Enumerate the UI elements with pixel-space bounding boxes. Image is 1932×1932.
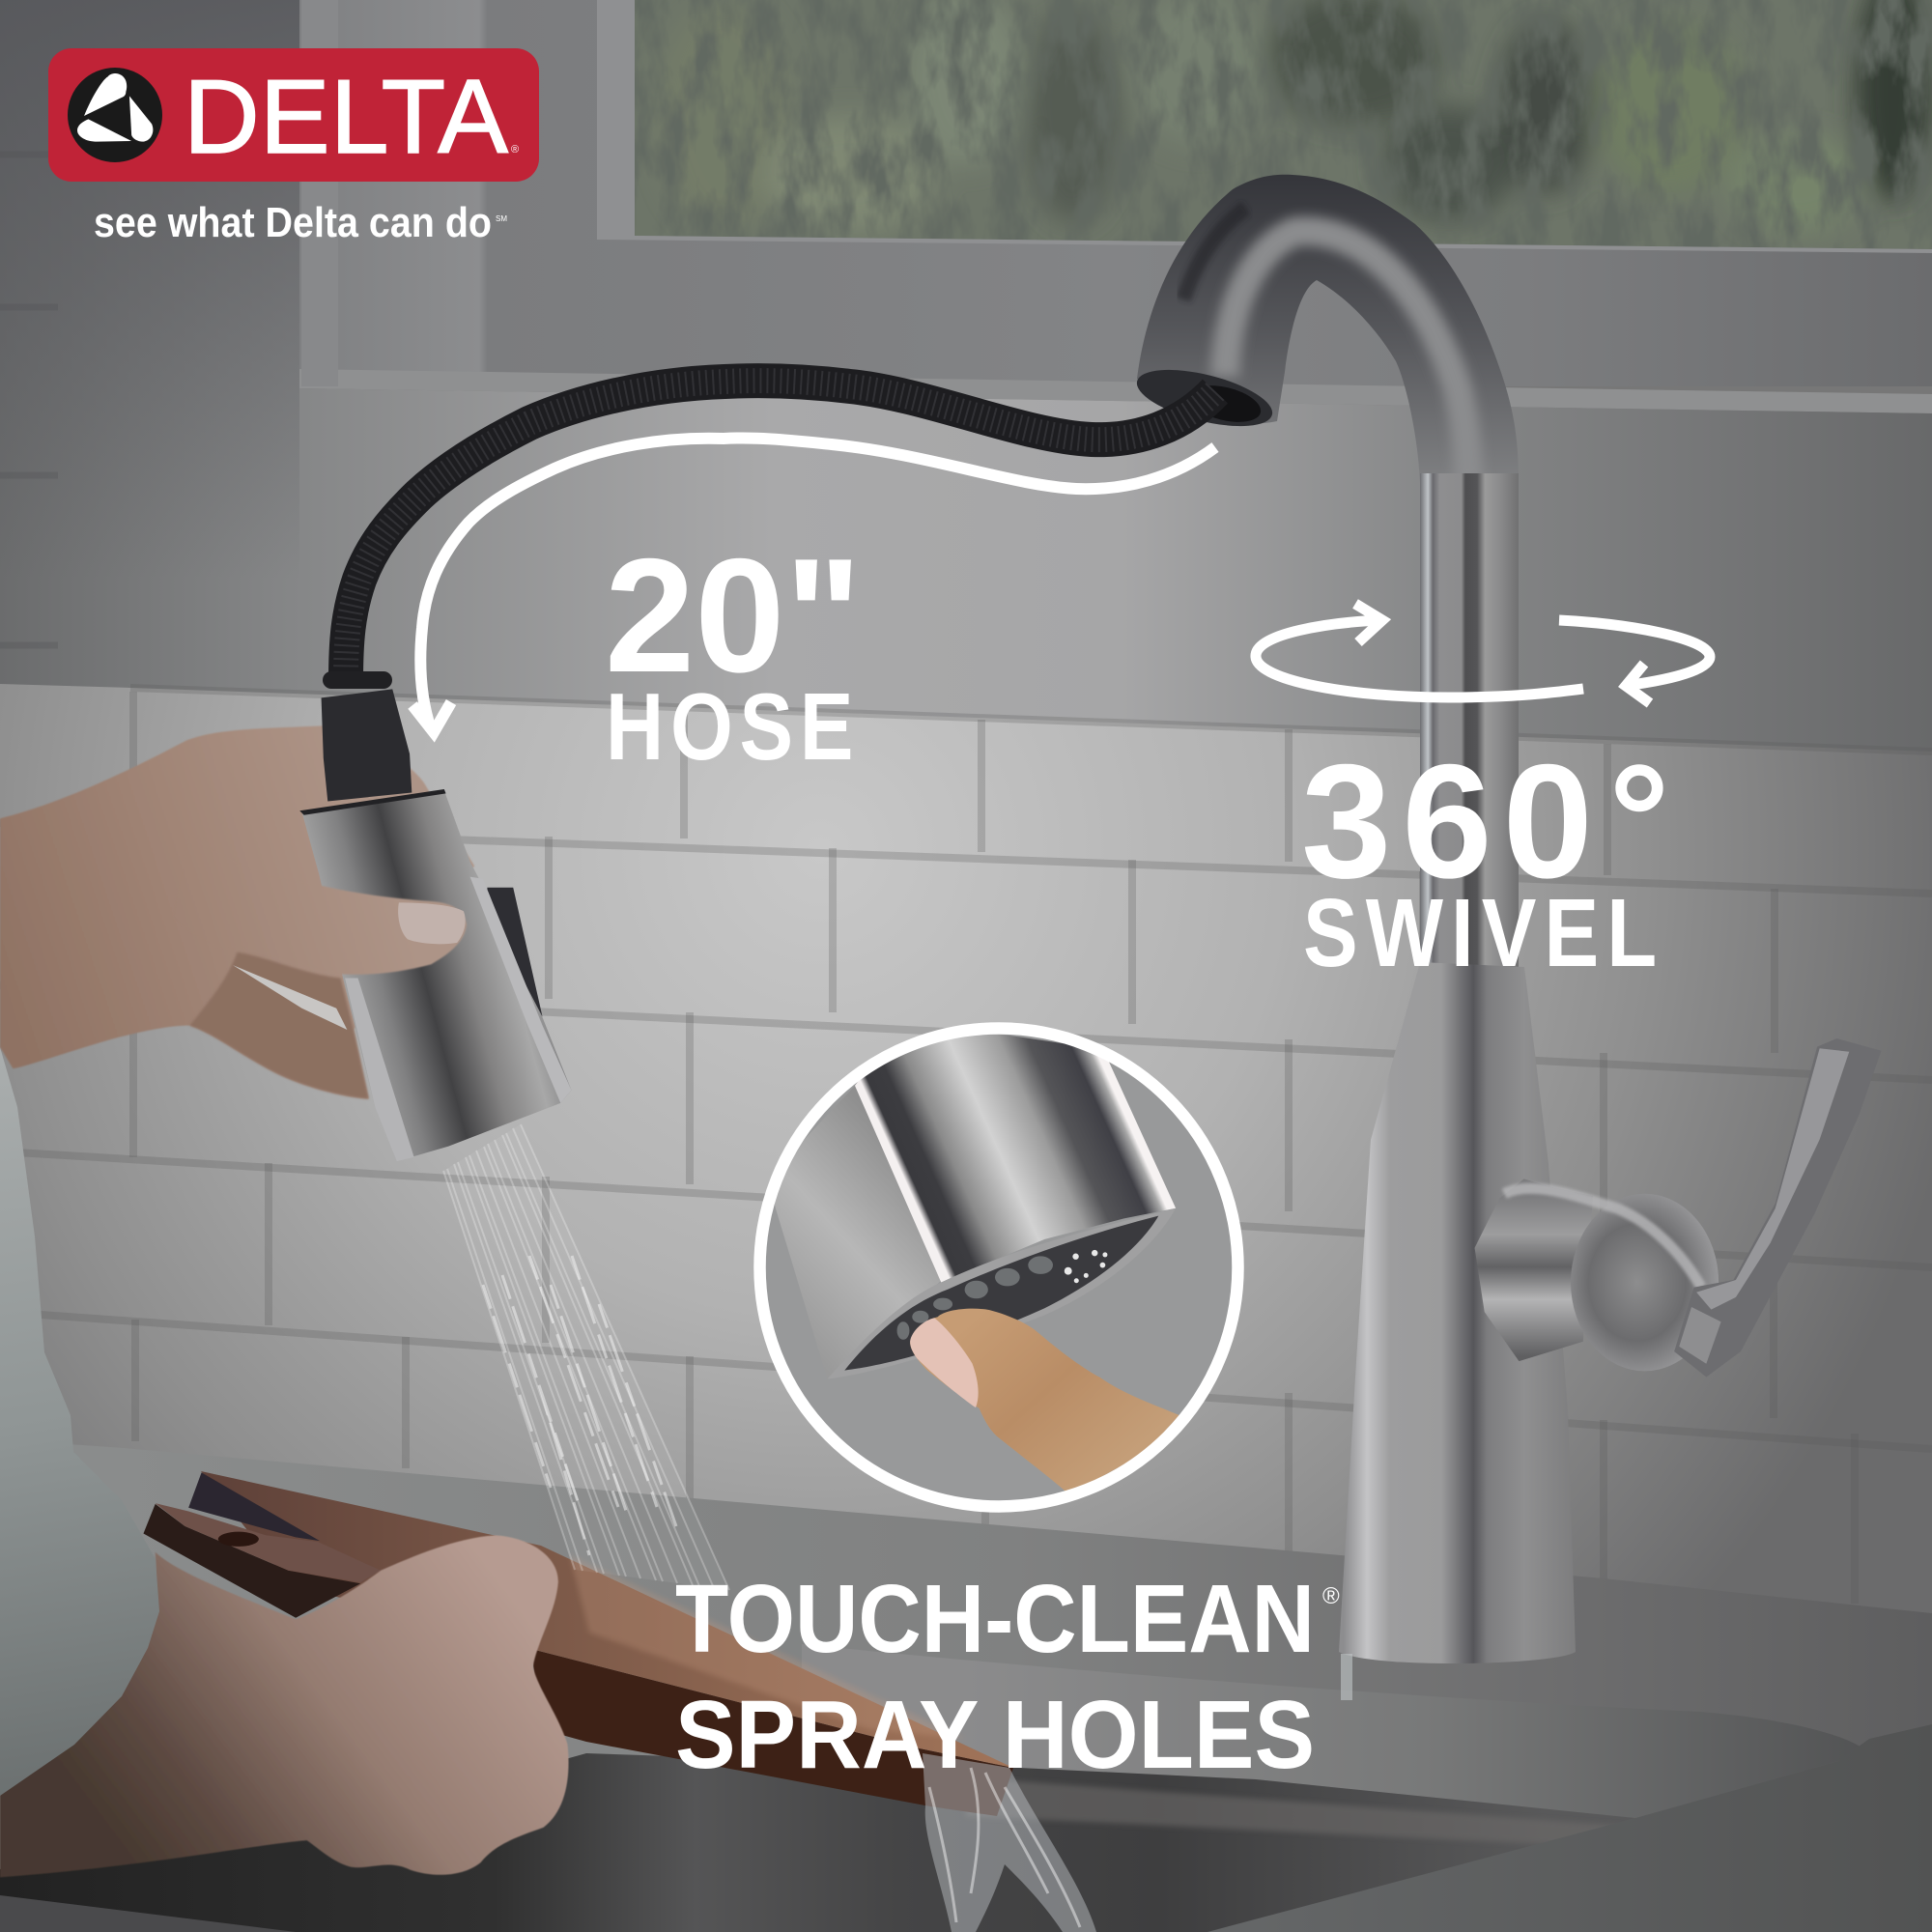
handle lever [1674,1038,1881,1378]
faucet vertical pipe [1420,473,1519,976]
spray highlights [483,1256,676,1555]
window view of trees [635,0,1932,251]
inset ring [759,1028,1238,1507]
fingernail [910,1318,979,1407]
runoff stream [923,1753,1096,1932]
board handle opening [188,1472,320,1541]
water spray [443,1124,729,1590]
sprayer left face [775,1086,941,1356]
sink interior [0,1753,1635,1932]
spout dark sheen [1183,208,1246,299]
logo wordmark: DELTA [184,58,508,176]
tagline service mark: SM [496,214,507,223]
hose collar [323,671,392,689]
spout mouth inner [1185,379,1264,429]
registered mark: ® [1322,1583,1340,1609]
hand palm and fingers [0,725,474,1098]
countertop [0,1439,1932,1932]
logo red badge [48,48,539,182]
board hole [218,1532,259,1547]
spray fan glow [443,1124,729,1590]
spray streams [443,1124,729,1590]
arrows: swivel rotation [1256,604,1710,703]
caption line one: TOUCH-CLEAN [675,1565,1315,1673]
upper hand and pull-down sprayer [0,689,571,1161]
window frame [597,0,1932,253]
faucet body [1339,962,1576,1663]
left wall shade [0,0,299,580]
360 number: 360 [1301,730,1593,912]
handle group [1475,1038,1881,1378]
chrome strip [470,877,571,1103]
hose body [346,381,1215,681]
sprayer head [301,790,571,1161]
faucet [1131,175,1881,1663]
brand logo [48,48,539,182]
nozzles [897,1256,1053,1340]
20 inch number: 20" [605,525,862,706]
pull-down hose [323,381,1215,689]
sink bowl side [802,1644,1864,1818]
arrow: hose length [412,438,1215,732]
sink rim glow [966,1777,1623,1845]
board side edge [531,1649,1013,1816]
shirt sleeve [0,1047,159,1796]
inset circle: touch-clean spray holes [759,1025,1238,1507]
runoff highlights [929,1768,1080,1927]
board top surface [201,1471,1013,1768]
left wall grout [0,155,58,645]
cutting board [143,1471,1013,1816]
degree sign: ° [1607,733,1671,911]
sprayer metal band [855,1025,1176,1282]
sprayer connector [322,689,412,801]
handle top ridge [1504,1188,1701,1288]
stat: 20 inch hose [605,525,862,781]
board handle side [143,1504,360,1618]
finger reflection [233,965,347,1030]
swivel label: SWIVEL [1303,878,1664,987]
trigger block [487,888,543,1017]
board handle prong [156,1503,381,1582]
lever highlight [1696,1048,1849,1310]
lever end facet [1679,1307,1721,1364]
foliage texture [635,0,1932,251]
spout mouth [1131,358,1278,438]
hose label: HOSE [606,675,860,781]
upper wall [0,0,1932,386]
spray face [844,1216,1158,1371]
head collar [299,789,446,815]
thumbnail [398,902,466,944]
inset background [760,1029,1237,1506]
lower hand and forearm [0,1535,569,1877]
window sill [299,369,1932,413]
wet sheen on board [570,1555,966,1739]
spout highlight [1225,231,1468,483]
nozzle highlights [1065,1250,1107,1283]
subway tiles [0,684,1932,1642]
fingertip [910,1309,1179,1494]
counter edge lower left [0,1895,296,1932]
handle hub [1475,1179,1593,1361]
lower fingers shade [189,952,369,1098]
water runoff into the sink [923,1753,1096,1932]
sprayer rim [867,1208,1176,1341]
logo delta mark [77,73,153,142]
hose braid [346,381,1215,681]
window side return [301,0,338,386]
caption line two: SPRAY HOLES [675,1681,1315,1789]
wall below sill [0,0,1932,763]
logo registered mark: ® [511,144,519,156]
caption: touch-clean spray holes [675,1565,1340,1789]
head left strip [345,978,414,1161]
counter reflection of faucet [1341,1654,1352,1700]
thumb [173,832,467,975]
handle dome [1571,1194,1719,1371]
tile grout lines [0,688,1932,1604]
stat: 360 degree swivel [1301,730,1671,987]
logo black circle [68,68,162,162]
counter front [1208,1724,1932,1932]
faucet spout arc [1137,175,1519,483]
brand tagline: see what Delta can do [94,199,492,246]
